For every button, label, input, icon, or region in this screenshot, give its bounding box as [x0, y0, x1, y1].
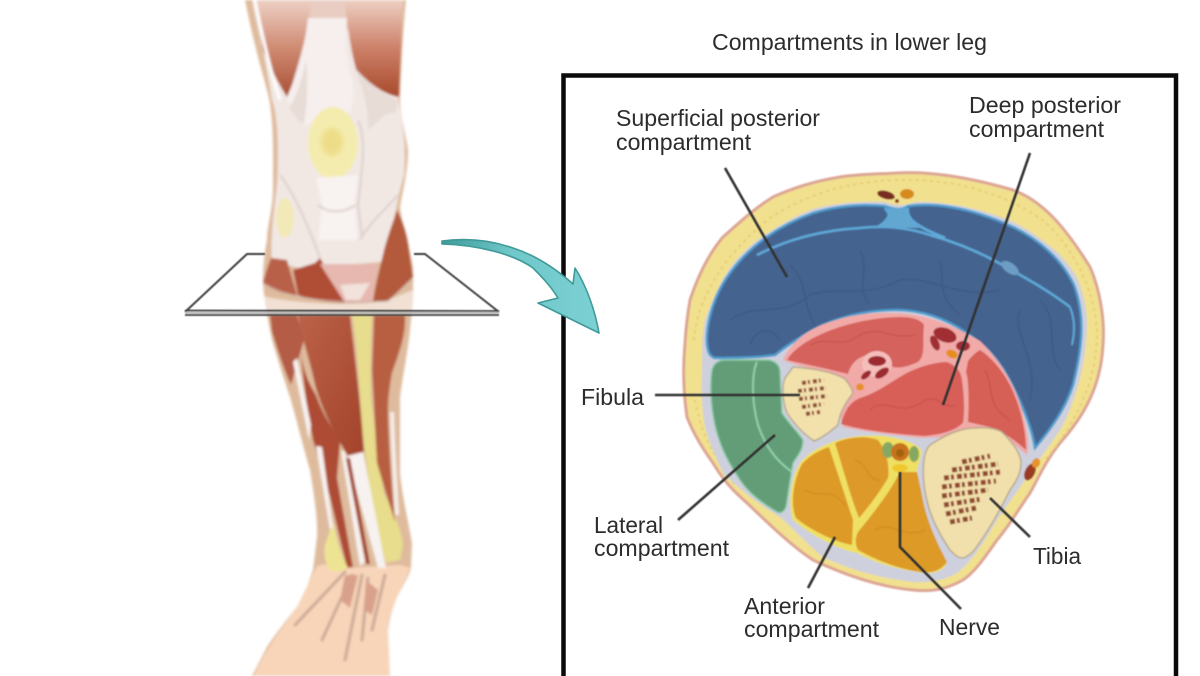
vessel group tibial	[928, 324, 970, 360]
white tendons group	[293, 358, 386, 568]
dark tendon strand	[346, 458, 370, 564]
label compartment: compartment	[744, 616, 880, 642]
knee white connective tissue	[252, 0, 405, 268]
tibia marrow	[942, 456, 1000, 522]
glass plane cover	[255, 290, 418, 312]
label compartment: compartment	[616, 129, 752, 155]
label tibia: Tibia	[1033, 543, 1081, 569]
main calf muscle	[298, 315, 364, 456]
white tendon right	[392, 412, 397, 515]
label fibula: Fibula	[581, 384, 644, 410]
orange muscle texture	[805, 460, 925, 533]
inner malleolus	[324, 522, 348, 572]
illustration: leg with muscles	[245, 0, 418, 676]
right shin muscle	[372, 315, 405, 522]
fibula shaft and malleolus	[352, 312, 403, 563]
shin muscle cross cut left	[263, 258, 297, 295]
red muscle texture	[810, 331, 1010, 420]
red muscle lower centre	[841, 362, 964, 436]
quadriceps tendon	[287, 18, 353, 125]
cross section of lower leg	[684, 173, 1103, 591]
label superficial posterior: Superficial posterior	[616, 105, 820, 131]
septum junction	[875, 208, 920, 228]
label compartment: compartment	[594, 535, 730, 561]
leader anterior	[808, 537, 835, 588]
vessel group peroneal	[856, 351, 892, 390]
ligament shading	[280, 120, 398, 258]
fat texture	[694, 180, 1097, 485]
leader nerve	[900, 472, 961, 609]
tibia bone	[923, 428, 1021, 558]
top saphenous vessels	[876, 189, 914, 203]
lateral compartment: green muscle	[711, 360, 803, 513]
patellar ligament	[316, 175, 358, 240]
foot	[254, 564, 410, 676]
leader lines	[655, 153, 1030, 609]
skin and subcutaneous fat	[684, 173, 1103, 591]
leader fibula	[655, 394, 800, 396]
red muscle right	[966, 350, 1026, 450]
leader tibia	[990, 498, 1030, 537]
shin muscle cross cut middle	[293, 258, 345, 303]
blue muscle cell texture	[730, 250, 1060, 400]
curved teal arrow	[442, 240, 599, 333]
orange muscle left	[793, 447, 853, 545]
quadriceps left	[256, 0, 312, 97]
label deep posterior: Deep posterior	[969, 92, 1121, 118]
label anterior: Anterior	[744, 593, 825, 619]
leader deep posterior	[943, 153, 1030, 405]
outer white band	[255, 0, 280, 100]
small lens in septum	[999, 258, 1021, 278]
green septum	[753, 362, 792, 472]
quadriceps right	[344, 0, 403, 97]
superficial posterior compartment: blue muscle	[707, 205, 1081, 448]
leader superficial posterior	[725, 168, 787, 277]
label lateral: Lateral	[594, 512, 663, 538]
leader lateral	[678, 435, 775, 520]
nerve and vessel bundle	[882, 442, 919, 472]
right side vessels	[1022, 457, 1042, 482]
label nerve: Nerve	[939, 614, 1000, 640]
foot tendon shading	[340, 575, 378, 615]
patella highlight	[321, 128, 343, 156]
leg skin outline	[245, 0, 413, 676]
patella	[308, 107, 358, 179]
label compartment: compartment	[969, 116, 1105, 142]
lower left muscle	[270, 315, 304, 385]
red muscle top	[787, 317, 924, 374]
pale section core	[340, 283, 370, 300]
upper pale thigh fade	[300, 0, 355, 30]
orange muscle lower right	[856, 472, 947, 572]
upper shin muscle right	[373, 210, 413, 302]
title: Compartments in lower leg	[712, 29, 987, 55]
fascia grey layer	[702, 202, 1087, 582]
lateral pale pad	[276, 198, 294, 238]
orange muscle top	[835, 437, 889, 518]
diagram frame	[564, 76, 1176, 676]
section pink tissue	[320, 264, 378, 303]
deep posterior compartment: pink fascia	[783, 313, 1028, 455]
anterior compartment: yellow fascia	[790, 435, 947, 573]
tendon shading	[289, 60, 397, 130]
transverse plane frame	[185, 254, 499, 315]
glass plane over leg edges	[263, 280, 413, 302]
fibula marrow	[798, 380, 827, 414]
fibula bone	[783, 367, 853, 441]
narrow long muscle	[301, 352, 353, 568]
blue compartment septum	[757, 208, 1074, 345]
foot tendons	[295, 572, 385, 660]
